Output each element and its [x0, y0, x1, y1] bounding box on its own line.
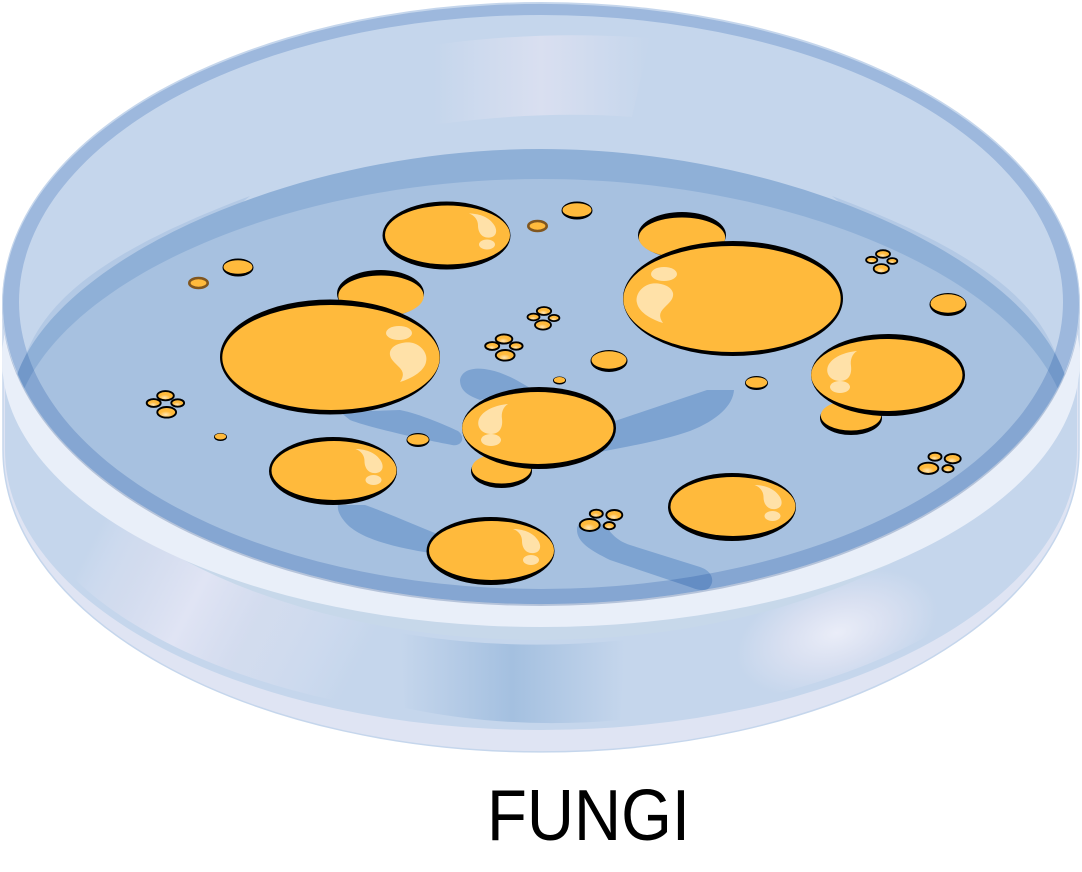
spore cluster left [147, 391, 184, 418]
spore cluster right [918, 453, 961, 474]
spore cluster centre [528, 307, 559, 330]
small colonies [214, 202, 966, 447]
dish base [2, 314, 1080, 753]
medium colony bottom right [668, 473, 796, 541]
spore cluster top right [866, 250, 897, 273]
agar medium [5, 149, 1077, 620]
back colony behind large right [638, 212, 726, 258]
lid disc [2, 2, 1080, 604]
medium colony top [382, 202, 510, 270]
medium colony bottom [426, 517, 554, 585]
hyphae strands [338, 369, 734, 590]
rim shadow [2, 4, 1080, 606]
ringed small colonies [189, 221, 547, 288]
white rim band [2, 93, 1080, 627]
large colony right [623, 241, 843, 356]
back colony under centre [471, 454, 532, 488]
back colony behind large left [337, 270, 424, 317]
back colony under right [820, 400, 882, 435]
large colony left [220, 300, 440, 414]
medium colony left [269, 437, 397, 505]
caption: FUNGI [487, 775, 690, 856]
medium colony centre [462, 387, 616, 469]
medium colony right [811, 334, 965, 416]
lid rim ring [3, 4, 1079, 604]
spore cluster centre left [485, 334, 523, 361]
spore cluster bottom [580, 510, 622, 531]
lid highlight [433, 35, 650, 125]
